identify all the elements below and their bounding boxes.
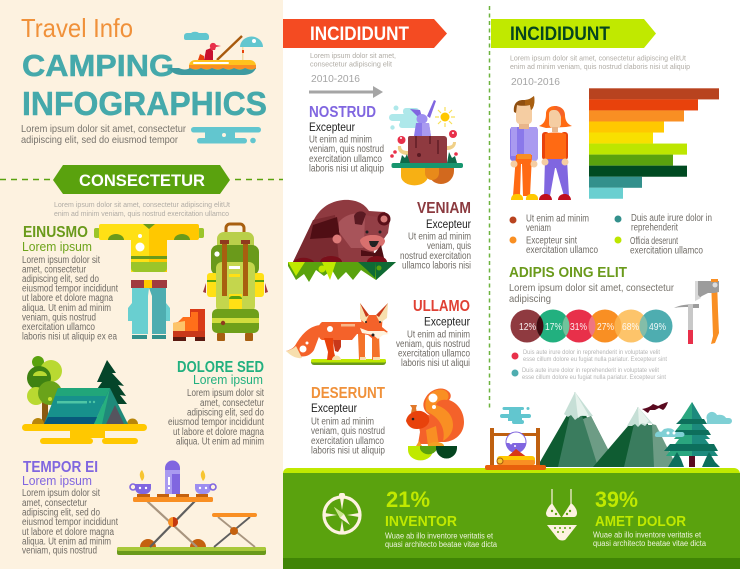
text block: red banner caption — [310, 53, 396, 68]
text block: lime banner caption — [510, 56, 690, 71]
text block: Inventor: quasi architecto beatae vitae dicta — [385, 540, 498, 549]
icon: axe — [695, 279, 719, 344]
text block: intro — [21, 123, 186, 146]
text block: circle legend — [512, 349, 667, 381]
text block: banner caption — [54, 202, 230, 218]
chart: overlapping percentage circles: 31% — [570, 322, 587, 333]
icon: bat — [642, 402, 668, 413]
text block: Inventor — [385, 487, 498, 549]
icon: squirrel — [406, 389, 464, 460]
legend: bar chart: Excepteur sint — [526, 236, 577, 246]
text block: Ullamo: Ut enim ad minim — [407, 330, 470, 340]
text block: Nostrud: Excepteur — [309, 122, 355, 134]
text block: Einusmo: EINUSMO — [23, 224, 88, 241]
banner: Incididunt lime — [491, 19, 656, 48]
text block: Amet Dolor: 39% — [595, 487, 638, 512]
title: Camping: CAMPING — [22, 48, 174, 83]
text block: Einusmo: Lorem ipsum — [22, 239, 92, 254]
text block: Einusmo: ut labore et dolore magna — [22, 293, 114, 304]
text block: Einusmo: amet, consectetur — [22, 264, 87, 276]
title: Infographics: INFOGRAPHICS — [22, 85, 267, 122]
legend: bar chart: reprehenderit — [631, 222, 678, 234]
man — [510, 96, 538, 200]
text block: intro: Lorem ipsum dolor sit amet, consectetur — [21, 123, 186, 135]
divider: dashed horizontal — [0, 178, 283, 180]
chart: overlapping percentage circles: 27% — [597, 322, 614, 333]
banner: Incididunt red: INCIDIDUNT — [310, 24, 409, 45]
icon: boot — [173, 309, 205, 341]
text block: Einusmo: laboris nisi ut aliquip ex ea — [22, 332, 118, 342]
text block: Veniam: Excepteur — [426, 219, 471, 231]
text block: Deserunt: Excepteur — [311, 403, 357, 415]
text block: Dolore Sed — [168, 359, 265, 448]
banner: Consectetur: CONSECTETUR — [79, 172, 205, 190]
text block: Nostrud: veniam, quis nostrud — [309, 144, 384, 155]
text block: Tempor Ei: eiusmod tempor incididunt — [22, 517, 118, 528]
panel: footer green — [283, 468, 740, 569]
text block: Einusmo: exercitation ullamco — [22, 322, 95, 333]
text block: Nostrud: Ut enim ad minim — [309, 134, 372, 146]
text block: Dolore Sed: amet, consectetur — [200, 398, 265, 409]
legend: bar chart: Ut enim ad minim — [526, 214, 589, 224]
legend: bar chart — [510, 213, 712, 256]
text block: Amet Dolor: AMET DOLOR — [595, 514, 686, 530]
text block: Deserunt: laboris nisi ut aliquip — [311, 446, 385, 456]
scene: mountains — [537, 392, 677, 467]
chart: overlapping percentage circles: 12% — [519, 322, 536, 333]
bar chart — [589, 88, 719, 199]
text block: Amet Dolor: Wuae ab illo inventore veritatis et — [593, 530, 702, 540]
text block: Ullamo: veniam, quis nostrud — [396, 339, 470, 350]
text block: Nostrud: NOSTRUD — [309, 104, 376, 121]
icon: man and woman — [510, 96, 572, 200]
text block: Dolore Sed: ut labore et dolore magna — [173, 427, 265, 438]
text block: Amet Dolor — [593, 487, 707, 548]
text block: Tempor Ei: Lorem ipsum — [22, 473, 92, 488]
legend: bar chart: veniam — [526, 223, 551, 234]
text block: circle legend: Duis aute irure dolor in reprehenderit in voluptate velit — [522, 367, 659, 374]
text block: Veniam — [400, 200, 471, 272]
text block: banner caption: enim ad minim veniam, quis nostrud exercitation ullamco — [54, 211, 229, 218]
icon: water streaks — [191, 127, 261, 144]
text block: red banner caption: Lorem ipsum dolor sit amet, — [310, 53, 396, 60]
chart: overlapping percentage circles — [510, 310, 672, 342]
text block: Tempor Ei: Lorem ipsum dolor sit — [22, 488, 100, 499]
icon: jacket — [94, 224, 204, 272]
legend: bar chart: exercitation ullamco — [630, 246, 703, 256]
text block: Tempor Ei: aliqua. Ut enim ad minim — [22, 536, 111, 548]
text block: lime banner caption: Lorem ipsum dolor sit amet, consectetur adipiscing elitUt — [510, 56, 686, 62]
icon: pine tree with clouds — [655, 402, 732, 467]
text block: Ullamo — [396, 298, 470, 369]
text block: Einusmo: eiusmod tempor incididunt — [22, 284, 118, 294]
text block: Einusmo: adipiscing elit, sed do — [22, 274, 99, 285]
text block: Ullamo: exercitation ullamco — [398, 348, 470, 360]
text block: intro: adipiscing elit, sed do eiusmod tempor — [21, 134, 178, 146]
text block: lime banner caption: enim ad minim veniam, quis nostrud claboris nisi ut aliquip — [510, 64, 690, 71]
text block: Nostrud: exercitation ullamco — [309, 154, 382, 165]
text block: Dolore Sed: Lorem ipsum — [193, 372, 263, 387]
icon: backpack — [203, 224, 268, 341]
woman — [539, 106, 572, 200]
text block: Inventor: Wuae ab illo inventore veritatis et — [385, 532, 494, 540]
icon: compass — [324, 493, 360, 533]
icon: campfire with pot — [485, 428, 546, 470]
text block: banner caption: Lorem ipsum dolor sit amet, consectetur adipiscing elitUt — [54, 202, 230, 209]
text block: Ullamo: ULLAMO — [413, 298, 470, 315]
icon: camping table with thermos and cups — [117, 460, 266, 555]
banner: Incididunt lime: INCIDIDUNT — [510, 24, 610, 45]
icon: rabbit on stump — [389, 100, 463, 185]
text block: Tempor Ei — [22, 459, 118, 556]
text block: Adipis: adipiscing — [509, 293, 551, 305]
chart: overlapping percentage circles: 17% — [545, 322, 562, 333]
icon: pickaxe — [674, 304, 699, 344]
text block: Einusmo: Lorem ipsum dolor sit — [22, 255, 100, 266]
text block: Tempor Ei: adipiscing elit, sed do — [22, 508, 100, 518]
text block: Dolore Sed: aliqua. Ut enim ad minim — [176, 436, 264, 448]
text block: Deserunt: Ut enim ad minim — [311, 416, 374, 428]
chart: overlapping percentage circles: 68% — [622, 322, 639, 333]
banner: Consectetur — [53, 165, 230, 194]
icon: cloud streak — [500, 407, 531, 424]
icon: bear on grass — [288, 200, 396, 282]
text block: Einusmo — [22, 224, 118, 342]
text block: Deserunt — [311, 385, 385, 456]
banner: Incididunt red — [283, 19, 447, 48]
legend: bar chart: Duis aute irure dolor in — [631, 213, 712, 224]
icon: boat on water — [169, 32, 263, 75]
icon: bikini — [546, 489, 577, 540]
text block: Dolore Sed: DOLORE SED — [177, 359, 264, 376]
heading: Travel Info: Travel Info — [21, 13, 133, 43]
text block: Tempor Ei: ut labore et dolore magna — [22, 527, 115, 538]
label: years right: 2010-2016 — [511, 77, 560, 88]
heading: Adipis Oing Elit: ADIPIS OING ELIT — [509, 265, 627, 281]
text block: Tempor Ei: TEMPOR EI — [23, 459, 98, 476]
text block: Inventor: INVENTOR — [385, 514, 457, 530]
icon: fox — [286, 303, 389, 365]
chart: overlapping percentage circles: 49% — [649, 322, 666, 333]
text block: Ullamo: laboris nisi ut aliqui — [401, 358, 470, 369]
text block: Deserunt: veniam, quis nostrud — [311, 426, 385, 437]
text block: Dolore Sed: adipiscing elit, sed do — [187, 408, 264, 418]
text block: Ullamo: Excepteur — [424, 316, 470, 328]
text block: Adipis: Lorem ipsum dolor sit amet, consectetur — [509, 282, 674, 294]
label: years: 2010-2016 — [311, 74, 360, 85]
icon: tent with trees — [22, 356, 147, 444]
icon: trousers — [128, 280, 170, 339]
text block: Tempor Ei: amet, consectetur — [22, 498, 88, 509]
text block: Deserunt: exercitation ullamco — [311, 436, 384, 447]
legend: bar chart: Officia deserunt — [630, 236, 678, 247]
text block: Deserunt: DESERUNT — [311, 385, 385, 402]
text block: Nostrud: laboris nisi ut aliquip — [309, 164, 384, 174]
text block: Nostrud — [309, 104, 384, 174]
text block: Veniam: ullamco laboris nisi — [402, 260, 471, 272]
text block: circle legend: Duis aute irure dolor in reprehenderit in voluptate velit — [523, 349, 660, 356]
legend: bar chart: exercitation ullamco — [526, 245, 598, 256]
arrow: timeline — [309, 86, 383, 98]
text block: circle legend: esse cillum dolore eu fugiat nulla pariatur. Excepteur sint — [522, 374, 666, 381]
text block: Tempor Ei: veniam, quis nostrud — [22, 546, 97, 556]
text block: Amet Dolor: quasi architecto beatae vitae dicta — [593, 539, 707, 548]
text block: Einusmo: veniam, quis nostrud — [22, 312, 96, 324]
text block: circle legend: esse cillum dolore eu fugiat nulla pariatur. Excepteur sint — [523, 356, 667, 363]
text block: Dolore Sed: Lorem ipsum dolor sit — [187, 388, 264, 399]
divider: dashed vertical — [488, 6, 490, 408]
text block: Veniam: Ut enim ad minim — [408, 232, 471, 242]
text block: Inventor: 21% — [386, 487, 430, 512]
text block: Einusmo: aliqua. Ut enim ad minim — [22, 303, 111, 314]
text block: Veniam: veniam, quis — [427, 241, 471, 252]
panel: left cream column — [0, 0, 283, 569]
text block: Dolore Sed: eiusmod tempor incididunt — [168, 417, 264, 428]
text block: red banner caption: consectetur adipiscing elit — [310, 62, 392, 68]
text block: Veniam: VENIAM — [417, 200, 471, 217]
text block: Veniam: nostrud exercitation — [400, 251, 471, 262]
text block: Adipis — [509, 282, 674, 305]
